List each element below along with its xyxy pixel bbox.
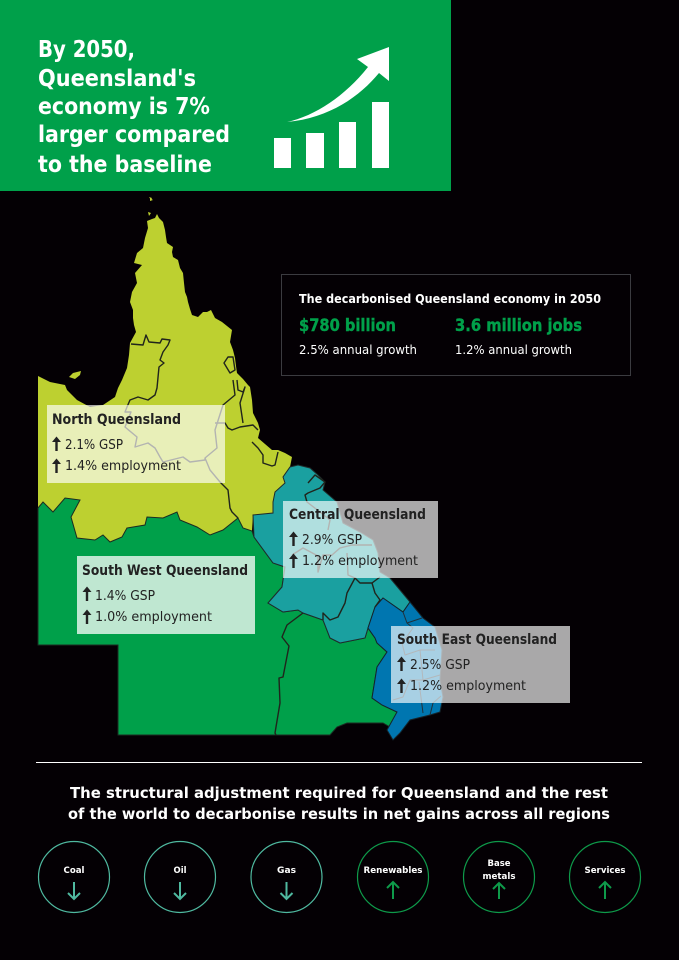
region: South West Queensland bbox=[38, 498, 397, 735]
label: North Queensland: North Queensland bbox=[52, 412, 181, 428]
stat: jobs: 3.6 million jobs bbox=[455, 316, 582, 336]
sector: Coal (down) bbox=[38, 842, 110, 912]
title: to the baseline bbox=[38, 152, 212, 178]
sector: Services (up): Services bbox=[584, 866, 626, 876]
stat: jobs bbox=[455, 316, 582, 357]
summary statement: of the world to decarbonise results in net gains across all regions bbox=[68, 805, 610, 823]
islands bbox=[69, 197, 153, 379]
sector: Base metals (up): Base bbox=[488, 859, 510, 869]
label: South East Queensland: 2.5% GSP bbox=[410, 658, 470, 673]
label: North Queensland bbox=[47, 405, 225, 483]
sector: Services (up) bbox=[570, 842, 640, 912]
label: Central Queensland: Central Queensland bbox=[289, 507, 426, 523]
sector: Renewables (up): Renewables bbox=[364, 866, 422, 876]
sector: Oil (down) bbox=[144, 842, 216, 912]
label: Central Queensland bbox=[283, 501, 438, 578]
callout heading: The decarbonised Queensland economy in 2050 bbox=[299, 291, 601, 306]
sector: Gas (down): Gas bbox=[277, 866, 296, 876]
label: North Queensland: 2.1% GSP bbox=[65, 438, 123, 453]
header panel bbox=[0, 0, 451, 191]
stat: GSP: 2.5% annual growth bbox=[299, 342, 417, 357]
South East internal borders bbox=[393, 612, 441, 715]
label: Central Queensland: 2.9% GSP bbox=[302, 533, 362, 548]
title: economy is 7% bbox=[38, 94, 210, 120]
label: North Queensland: 1.4% employment bbox=[65, 459, 181, 474]
label: South East Queensland bbox=[391, 626, 570, 703]
map of Queensland regions bbox=[38, 197, 443, 740]
label: South East Queensland: 1.2% employment bbox=[410, 679, 526, 694]
sector: Renewables (up) bbox=[358, 842, 428, 912]
region: Central Queensland bbox=[253, 465, 410, 643]
sector: Base metals (up): metals bbox=[482, 872, 516, 882]
label: South West Queensland: South West Queensland bbox=[82, 563, 248, 579]
region: South East Queensland bbox=[368, 598, 443, 740]
summary statement bbox=[68, 784, 610, 823]
title: larger compared bbox=[38, 122, 230, 148]
title: By 2050, bbox=[38, 37, 135, 63]
title bbox=[38, 37, 230, 178]
internal region borders bbox=[125, 335, 380, 735]
label: South West Queensland: 1.4% GSP bbox=[95, 589, 155, 604]
sector: Coal (down): Coal bbox=[64, 866, 84, 876]
sector: Gas (down) bbox=[251, 842, 322, 912]
stat: GSP bbox=[299, 316, 417, 357]
label: South West Queensland: 1.0% employment bbox=[95, 610, 212, 625]
callout: economy in 2050 bbox=[282, 274, 630, 376]
label: South East Queensland: South East Queensland bbox=[397, 632, 557, 648]
sector: Oil (down): Oil bbox=[174, 866, 186, 876]
icon: rising bar chart with arrow bbox=[274, 47, 389, 168]
region: North Queensland bbox=[38, 214, 292, 542]
title: Queensland's bbox=[38, 66, 196, 92]
summary statement: The structural adjustment required for Queensland and the rest bbox=[70, 784, 609, 802]
label: Central Queensland: 1.2% employment bbox=[302, 554, 418, 569]
sector: Base metals (up) bbox=[464, 842, 534, 912]
stat: jobs: 1.2% annual growth bbox=[455, 342, 572, 357]
stat: GSP: $780 billion bbox=[299, 316, 396, 336]
label: South West Queensland bbox=[77, 556, 255, 634]
